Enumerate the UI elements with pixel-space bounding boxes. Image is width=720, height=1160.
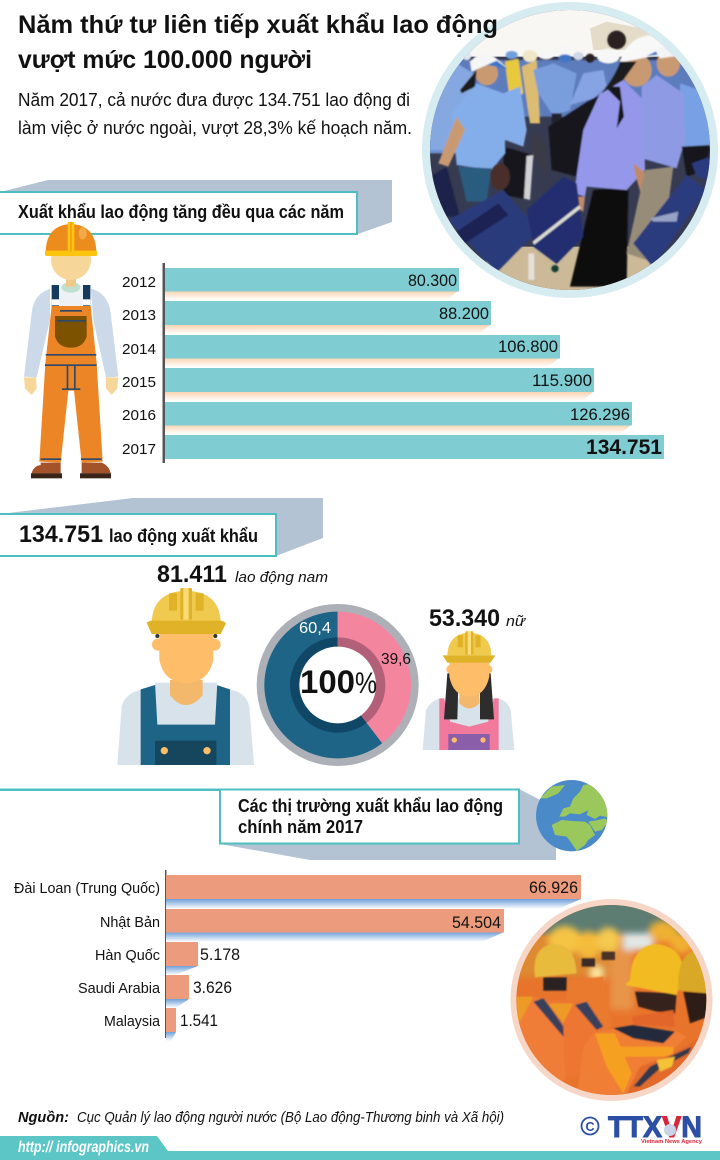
donut chart: male/female share — [257, 604, 419, 766]
heading: main markets: Các thị trường xuất khẩu lao động — [238, 796, 503, 816]
bar: 2016 — [122, 402, 632, 434]
donut labels: % — [355, 667, 377, 700]
bar: 2015: 2015 — [122, 374, 156, 391]
bar: Hàn Quốc — [95, 942, 240, 975]
footer bar with URL: http:// infographics.vn — [18, 1139, 149, 1156]
bar: 2016: 2016 — [122, 407, 156, 424]
bar: Đài Loan — [14, 875, 581, 909]
intro text: làm việc ở nước ngoài, vượt 28,3% kế hoạch năm. — [18, 118, 412, 138]
bar: 2012: 80.300 — [408, 271, 457, 290]
bar: 2017: 134.751 — [586, 436, 662, 459]
intro text: Năm 2017, cả nước đưa được 134.751 lao động đi — [18, 90, 410, 110]
bar: 2014: 106.800 — [498, 337, 558, 356]
source: Cục Quản lý lao động người nước (Bộ Lao động-Thương binh và Xã hội) — [77, 1110, 504, 1126]
bar: 2017 — [122, 435, 664, 459]
heading: 134.751 workers: 134.751 — [19, 521, 103, 548]
bar chart: main markets — [14, 870, 581, 1041]
icon: male worker — [117, 588, 254, 765]
intro text — [18, 90, 412, 138]
logo: TTXVN: Vietnam News Agency — [641, 1139, 703, 1145]
source: Nguồn: — [18, 1110, 69, 1126]
bar chart: labour export by year — [122, 263, 664, 463]
icon: worker in orange overalls — [24, 222, 118, 478]
footer bar with URL — [0, 1136, 720, 1160]
heading: 134.751 workers — [0, 498, 323, 556]
bar: 2015 — [122, 368, 594, 401]
bar: 2014 — [122, 335, 560, 367]
right person — [627, 167, 673, 260]
bar: Nhật Bản — [100, 909, 504, 942]
black case — [503, 147, 533, 200]
logo: TTXVN: TTXVN — [608, 1111, 702, 1144]
title: Năm thứ tư liên tiếp xuất khẩu lao động — [18, 11, 498, 39]
female count label: 53.340 — [429, 605, 500, 632]
slice: male 60,4 — [264, 612, 382, 758]
icon: female worker — [423, 631, 514, 750]
bar: Nhật Bản: 54.504 — [452, 913, 501, 932]
bar: 2013: 88.200 — [439, 304, 489, 323]
photo: workers in orange with helmets — [510, 899, 713, 1103]
background crowd — [458, 58, 696, 118]
male count label — [157, 561, 328, 588]
slice: female 39,6 — [338, 612, 411, 743]
logo: TTXVN: C — [586, 1119, 595, 1134]
heading: main markets: chính năm 2017 — [238, 817, 363, 837]
bar: Malaysia — [104, 1008, 218, 1041]
donut labels: 100 — [300, 664, 355, 700]
heading: yearly growth: Xuất khẩu lao động tăng đều qua các năm — [18, 202, 344, 222]
heading: 134.751 workers: lao động xuất khẩu — [109, 526, 258, 546]
bar: 2012: 2012 — [122, 274, 156, 291]
donut labels — [299, 620, 411, 700]
bar: 2017: 2017 — [122, 441, 156, 458]
male count label: lao động nam — [235, 569, 328, 586]
female count label: nữ — [506, 613, 527, 630]
bar: Hàn Quốc: 5.178 — [200, 945, 240, 964]
photo: workers with suitcases — [420, 0, 720, 298]
bar: Saudi Arabia — [78, 975, 232, 1008]
bar: Saudi Arabia: Saudi Arabia — [78, 981, 161, 997]
donut labels: 39,6 — [381, 651, 411, 668]
bar: Malaysia: Malaysia — [104, 1014, 161, 1030]
bar: Đài Loan: 66.926 — [529, 878, 578, 897]
title — [18, 11, 498, 74]
divider line — [0, 788, 222, 791]
donut labels: 60,4 — [299, 620, 331, 637]
bar: 2013 — [122, 301, 491, 334]
title: vượt mức 100.000 người — [18, 46, 312, 74]
backpack person — [548, 95, 600, 177]
icon: globe — [536, 780, 610, 851]
heading: main markets — [220, 789, 556, 860]
heading: yearly growth — [0, 180, 392, 234]
bar: Saudi Arabia: 3.626 — [193, 978, 232, 997]
bar: 2016: 126.296 — [570, 405, 630, 424]
suitcases — [448, 190, 538, 273]
male count label: 81.411 — [157, 561, 227, 588]
bar: Malaysia: 1.541 — [180, 1011, 218, 1030]
bar: 2012 — [122, 268, 459, 300]
bar: 2013: 2013 — [122, 307, 156, 324]
bar: Hàn Quốc: Hàn Quốc — [95, 948, 160, 964]
bar: Đài Loan: Đài Loan (Trung Quốc) — [14, 881, 160, 897]
bar: 2015: 115.900 — [532, 371, 592, 390]
left person — [452, 83, 527, 170]
bar: Nhật Bản: Nhật Bản — [100, 915, 160, 931]
bar: 2014: 2014 — [122, 341, 156, 358]
